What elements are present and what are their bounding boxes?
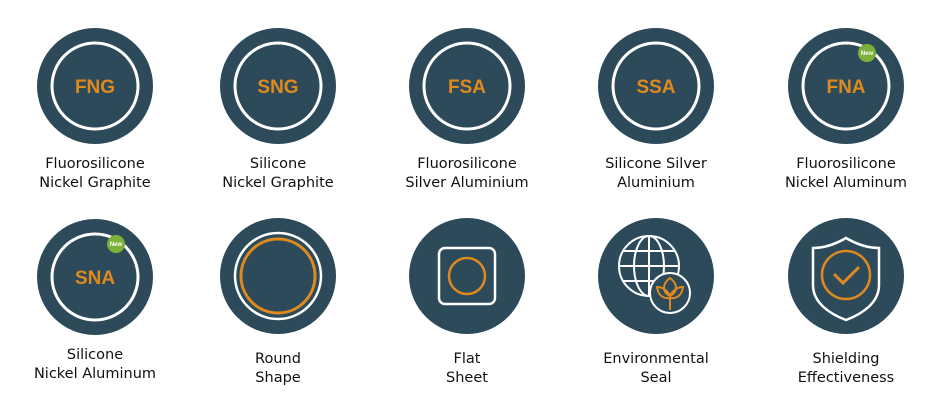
label: SNG [222,156,334,191]
icon: FSA [409,28,525,144]
icon: environmental seal [598,218,714,334]
label: FSA [405,156,529,191]
label: FNG: Fluorosilicone [45,156,145,172]
label: SNA: Silicone [67,347,123,363]
icon: SSA: SSA [636,77,676,98]
label: shielding effectiveness: Shielding [812,351,880,367]
label: FSA: Fluorosilicone [417,156,517,172]
label: SNG: Silicone [250,156,306,172]
label: shielding effectiveness: Effectiveness [798,370,894,386]
label: flat sheet: Sheet [446,370,488,386]
icon: FNG: FNG [75,77,115,98]
label: flat sheet: Flat [454,351,481,367]
label: FNG: Nickel Graphite [39,175,151,191]
icon: FNA [788,28,904,144]
icon: flat sheet [409,218,525,334]
label: environmental seal [603,351,709,386]
label: environmental seal: Seal [640,370,672,386]
icon: FSA: FSA [448,77,486,98]
icon: FNA: FNA [826,77,866,98]
icon: shielding effectiveness [788,218,904,334]
label: SSA [605,156,707,191]
label: FNG [39,156,151,191]
label: SNG: Nickel Graphite [222,175,334,191]
badge: new: New [110,242,122,248]
label: FSA: Silver Aluminium [405,175,529,191]
label: FNA: Fluorosilicone [796,156,896,172]
label: SNA: Nickel Aluminum [34,366,156,382]
icon: round shape [220,218,336,334]
icon: SNA [37,219,153,335]
label: environmental seal: Environmental [603,351,709,367]
icon: SNG: SNG [257,77,299,98]
label: round shape: Round [255,351,301,367]
label: SNA [34,347,156,382]
icon: SSA [598,28,714,144]
badge: new: New [861,51,873,57]
label: round shape [255,351,301,386]
icon: FNG [37,28,153,144]
label: flat sheet [446,351,488,386]
label: SSA: Silicone Silver [605,156,707,172]
label: FNA: Nickel Aluminum [785,175,907,191]
label: shielding effectiveness [798,351,894,386]
icon: SNG [220,28,336,144]
label: FNA [785,156,907,191]
label: round shape: Shape [255,370,301,386]
label: SSA: Aluminium [617,175,695,191]
icon: SNA: SNA [75,268,115,289]
